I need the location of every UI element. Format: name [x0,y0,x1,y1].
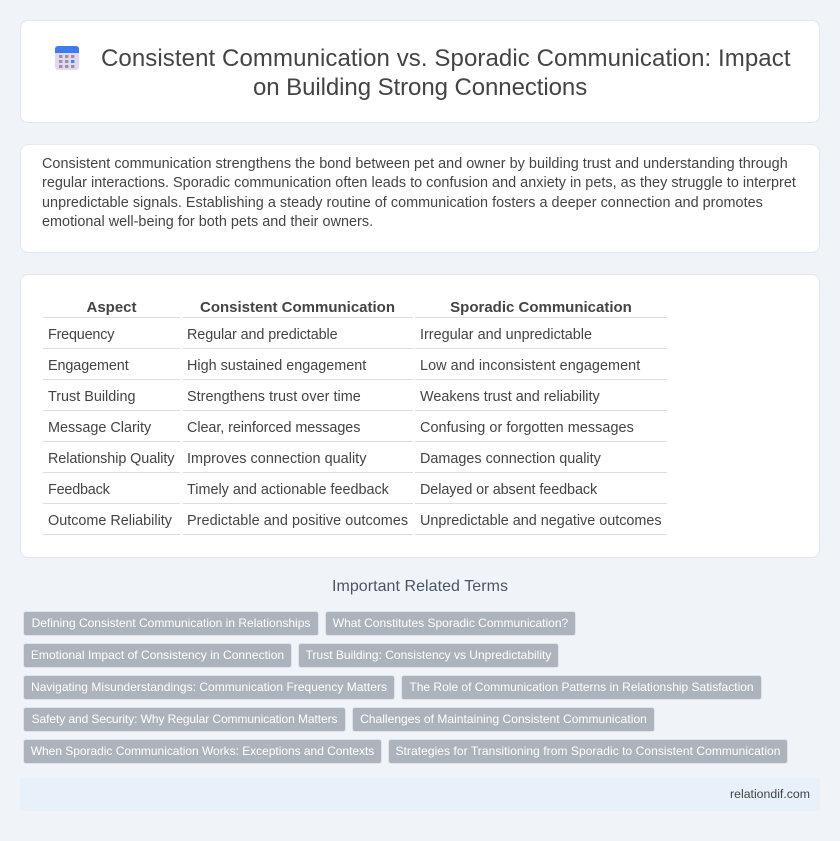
footer text: relationdif.com [730,787,810,801]
row: relationship quality: Damages connection quality [420,451,601,467]
icon: calendar [55,46,79,70]
row: trust building [48,389,600,405]
tag: Navigating Misunderstandings: Communication Frequency Matters [31,680,387,694]
title: on Building Strong Connections [253,74,587,101]
tag [23,675,395,700]
title: Consistent Communication vs. Sporadic Communication: Impact [101,45,791,72]
footer bar [20,778,820,811]
intro text [42,156,796,230]
intro text: regular interactions. Sporadic communication often leads to confusion and anxiety in pets, as they struggle to interpret [42,175,796,191]
tag [388,739,788,764]
table header: sporadic: Sporadic Communication [450,298,632,316]
row: engagement: Low and inconsistent engagement [420,358,640,374]
tag [325,611,576,636]
table header: consistent: Consistent Communication [200,298,395,316]
row: feedback [48,482,598,498]
row: feedback: Timely and actionable feedback [187,482,389,498]
header panel [20,20,820,123]
row: outcome reliability: Predictable and positive outcomes [187,513,408,529]
row: relationship quality [48,451,601,467]
tag: When Sporadic Communication Works: Exceptions and Contexts [31,744,374,758]
row: relationship quality: Relationship Quality [48,451,174,467]
row: feedback: Delayed or absent feedback [420,482,597,498]
tag: The Role of Communication Patterns in Relationship Satisfaction [409,680,754,694]
tag [23,739,382,764]
row: engagement: Engagement [48,358,129,374]
row: outcome reliability [48,513,662,529]
row: message clarity [48,420,634,436]
row: relationship quality: Improves connection quality [187,451,366,467]
tag: Trust Building: Consistency vs Unpredictability [306,648,551,662]
row: frequency: Irregular and unpredictable [420,327,592,343]
row: trust building: Strengthens trust over time [187,389,361,405]
row: trust building: Weakens trust and reliability [420,389,600,405]
row: engagement: High sustained engagement [187,358,366,374]
row: outcome reliability: Unpredictable and negative outcomes [420,513,662,529]
tag: Strategies for Transitioning from Sporadic to Consistent Communication [395,744,781,758]
row: trust building: Trust Building [48,389,135,405]
tag: Safety and Security: Why Regular Communication Matters [32,712,337,726]
row: feedback: Feedback [48,482,110,498]
row: outcome reliability: Outcome Reliability [48,513,172,529]
tag [23,611,319,636]
tag: Defining Consistent Communication in Relationships [32,616,310,630]
tag [23,643,292,668]
title [101,45,791,101]
comparison table panel [20,274,820,558]
row: frequency: Regular and predictable [187,327,338,343]
intro text: Consistent communication strengthens the bond between pet and owner by building trust and understanding through [42,156,788,172]
row: message clarity: Message Clarity [48,420,151,436]
table header: aspect: Aspect [86,298,137,316]
tag: Emotional Impact of Consistency in Connection [31,648,284,662]
row: engagement [48,358,640,374]
intro text: unpredictable signals. Establishing a steady routine of communication fosters a deeper connection and promotes [42,195,763,211]
tag [401,675,762,700]
row: frequency [48,327,592,343]
row: message clarity: Confusing or forgotten messages [420,420,634,436]
related terms heading: Important Related Terms [332,578,508,595]
row: frequency: Frequency [48,327,114,343]
tag [298,643,559,668]
row: message clarity: Clear, reinforced messages [187,420,360,436]
tag: Challenges of Maintaining Consistent Communication [360,712,647,726]
intro text: emotional well-being for both pets and their owners. [42,214,373,230]
related terms tags [23,611,788,764]
tag: What Constitutes Sporadic Communication? [333,616,568,630]
tag [352,707,655,732]
intro panel [20,144,820,253]
tag [23,707,346,732]
comparison table [43,298,667,535]
